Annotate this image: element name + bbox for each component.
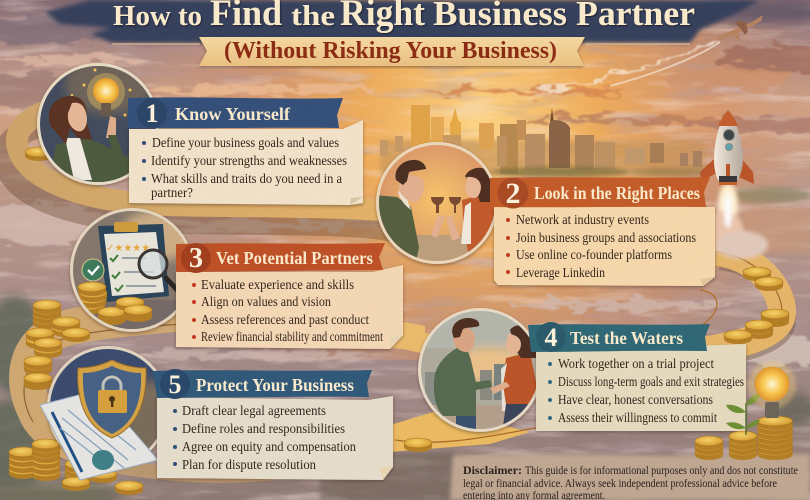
title: How to — [113, 0, 202, 32]
panel: step 2 look in the right places — [375, 142, 715, 286]
rocket with exhaust — [700, 110, 768, 259]
bullet list: Discuss long-term goals and exit strategies — [558, 374, 744, 389]
bullet list: Join business groups and associations — [516, 230, 696, 245]
bullet list — [173, 403, 356, 472]
illustration: clipboard and magnifier — [70, 208, 200, 340]
illustration: two people toasting — [375, 142, 499, 267]
bullet list: partner? — [151, 185, 193, 200]
heading banner: 1 — [146, 99, 158, 128]
illustration: clipboard and magnifier: ✓★★★★ — [106, 243, 150, 254]
panel: step 3 vet potential partners — [70, 208, 403, 349]
bullet list — [192, 277, 383, 344]
illustration: shield, padlock and contract — [39, 346, 158, 481]
bullet list: Agree on equity and compensation — [182, 439, 356, 454]
bullet list: Align on values and vision — [201, 294, 331, 309]
heading banner — [153, 369, 372, 399]
heading banner: Know Yourself — [175, 104, 291, 124]
heading banner: Look in the Right Places — [534, 183, 700, 203]
bullet list: Work together on a trial project — [558, 356, 714, 371]
road: winding golden path — [5, 95, 786, 476]
coin stacks: bottom left — [9, 439, 143, 495]
heading banner: 2 — [506, 177, 520, 210]
coin stacks with sprout and light bulb — [695, 361, 796, 460]
trees left — [0, 295, 810, 500]
city skyline — [380, 105, 810, 253]
bullet list: Assess references and past conduct — [201, 312, 369, 327]
bullet list: Have clear, honest conversations — [558, 392, 713, 407]
bottom ground — [320, 452, 455, 500]
bullet list: Evaluate experience and skills — [201, 277, 354, 292]
bullet list: Draft clear legal agreements — [182, 403, 326, 418]
bullet list: Leverage Linkedin — [516, 265, 605, 280]
bullet list: Define roles and responsibilities — [182, 421, 345, 436]
bullet list: Identify your strengths and weaknesses — [151, 153, 347, 168]
heading banner — [528, 322, 710, 352]
exhaust smoke — [700, 183, 768, 259]
title band — [45, 0, 760, 44]
bullet list: Plan for dispute resolution — [182, 457, 316, 472]
bullet list: Define your business goals and values — [152, 135, 339, 150]
coin stacks: left side — [24, 147, 90, 390]
light bulb — [748, 361, 796, 418]
bullet list — [506, 212, 696, 280]
airplane with contrail — [530, 15, 763, 94]
heading banner: Test the Waters — [570, 328, 683, 348]
illustration: woman holding light bulb — [37, 55, 160, 190]
bullet list — [142, 135, 347, 200]
title — [113, 0, 695, 34]
disclaimer — [450, 454, 810, 500]
bullet list: Review financial stability and commitment — [201, 329, 383, 344]
heading banner: 4 — [544, 323, 558, 352]
bullet list: What skills and traits do you need in a — [151, 171, 342, 186]
illustration: handshake between two people — [418, 308, 542, 435]
sprout — [726, 393, 761, 435]
disclaimer: legal or financial advice. Always seek independent professional advice before — [463, 478, 777, 490]
heading banner: 5 — [168, 370, 182, 399]
heading banner: Vet Potential Partners — [216, 248, 373, 268]
disclaimer: Disclaimer: — [463, 465, 522, 477]
bullet list — [548, 356, 744, 425]
heading banner: Protect Your Business — [196, 375, 354, 395]
panel: step 5 protect your business — [40, 346, 393, 480]
heading banner — [128, 97, 343, 128]
heading banner — [490, 177, 710, 210]
heading banner — [176, 243, 385, 274]
panel: step 4 test the waters — [418, 308, 746, 435]
bullet list: Use online co-founder platforms — [516, 247, 672, 262]
title: the — [291, 0, 335, 32]
subtitle ribbon: (Without Risking Your Business) — [224, 38, 557, 64]
panel: step 1 know yourself — [37, 55, 363, 205]
bullet list: Assess their willingness to commit — [558, 410, 717, 425]
heading banner: 3 — [189, 243, 203, 274]
coin stacks: right road — [404, 267, 789, 452]
bullet list: Network at industry events — [516, 212, 649, 227]
